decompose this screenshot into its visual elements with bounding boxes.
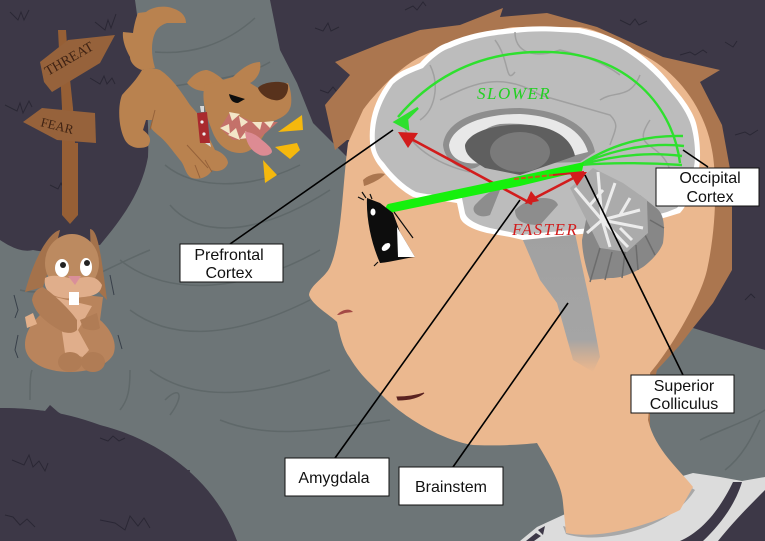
label: superior colliculus [631,375,734,413]
label: amygdala [285,458,389,496]
eyebrow [363,173,385,186]
cerebellum [570,168,664,282]
dog [119,7,303,183]
label: prefrontal cortex: Prefrontal [194,247,264,264]
slower arc pathway [395,52,684,165]
slower label: SLOWER [477,84,551,103]
brainstem [522,210,600,372]
label: prefrontal cortex [180,244,283,282]
sign: fear: FEAR [39,114,75,137]
shiver lines [14,275,122,358]
tail [123,7,186,70]
sign: threat: THREAT [42,39,97,79]
collar [197,106,211,147]
eyes [55,259,69,277]
shirt [520,473,765,541]
nose [258,82,288,100]
label: superior colliculus: Superior [654,378,715,395]
midbrain and amygdala [474,190,558,225]
sign: fear [23,108,96,143]
corpus callosum [449,114,588,163]
left ear [187,70,230,91]
buck teeth [69,292,79,305]
nose mark [337,310,353,315]
label: occipital cortex: Cortex [686,189,734,206]
feet [58,352,82,372]
eye [358,192,415,266]
cingulate band [443,108,595,169]
sign: threat [40,35,115,92]
hair [325,8,732,447]
eye [229,94,245,103]
mouth [397,393,424,400]
red thin pathway with dashes [514,172,584,179]
arms [32,287,100,333]
body [25,290,115,372]
label: occipital cortex [656,168,759,206]
teeth [220,112,274,140]
label: brainstem: Brainstem [415,479,487,496]
leader lines [230,130,708,467]
rabbit [14,229,122,372]
nose [68,276,81,285]
gyri lines [405,32,670,172]
label: amygdala: Amygdala [298,470,370,487]
brain outline [370,26,700,240]
cerebrum [375,31,695,235]
faster label: FASTER [511,220,578,239]
mouth [220,112,278,140]
chest [55,297,92,357]
brain [370,26,700,372]
signpost [23,30,115,224]
grass tufts [5,2,758,300]
face [309,27,715,535]
tail [25,313,37,328]
label: superior colliculus: Colliculus [650,396,718,413]
tongue [245,132,272,156]
body [119,68,228,179]
label: occipital cortex: Occipital [679,170,741,187]
ears [25,229,107,300]
head [203,62,291,153]
post [58,30,78,224]
faster red arrows [398,132,587,204]
head [45,234,99,292]
paw lines [150,110,212,178]
label: brainstem [399,467,503,505]
label: prefrontal cortex: Cortex [205,265,253,282]
ventricle and thalamus [465,125,575,175]
cheeks [45,276,102,298]
thick green visual pathway [386,162,584,213]
bark marks [263,115,303,183]
lower left bush [0,405,237,541]
